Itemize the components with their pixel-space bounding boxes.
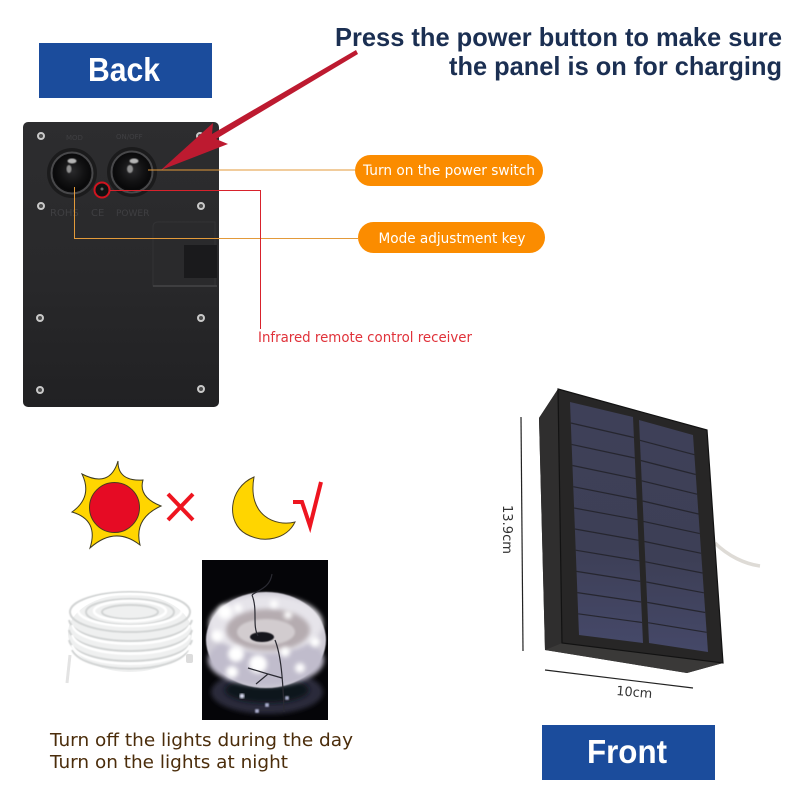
- battery cover: [153, 222, 217, 286]
- photo: rope light daytime: [67, 592, 193, 683]
- dimension: width: [545, 670, 693, 702]
- label: Back: Back: [88, 51, 161, 88]
- embossed marks: CE: [91, 208, 104, 219]
- leader line: power switch: [148, 169, 355, 171]
- embossed marks: [50, 133, 149, 219]
- infrared receiver: [94, 182, 110, 198]
- panel casing: [539, 389, 723, 673]
- embossed marks: ROHS: [50, 208, 79, 219]
- photo: rope light at night: [202, 560, 328, 720]
- glowing coil: [206, 592, 326, 688]
- solar cells: [570, 402, 708, 652]
- icon: cross: [168, 494, 193, 520]
- text: day and night usage: [49, 730, 353, 773]
- embossed marks: POWER: [116, 209, 149, 219]
- photo: solar panel front: [539, 389, 760, 673]
- dimension: height: 13.9cm: [499, 505, 514, 554]
- icon: sun: [72, 461, 161, 548]
- leader line: mode key: [74, 187, 358, 238]
- panel: back of solar box: [23, 122, 219, 407]
- wires: [248, 574, 284, 712]
- label: Front: Front: [587, 733, 667, 770]
- embossed marks: MOD: [66, 134, 83, 142]
- heading: power button instruction: the panel is on for charging: [449, 51, 782, 81]
- text: day and night usage: Turn on the lights at night: [49, 752, 288, 773]
- heading: power button instruction: Press the power button to make sure: [335, 22, 782, 52]
- bright spots: [211, 600, 320, 678]
- callout: mode key: [358, 222, 545, 253]
- button: mode: [47, 148, 97, 198]
- label: Front: [542, 725, 715, 780]
- icon: check: [293, 482, 321, 526]
- embossed marks: ON/OFF: [116, 133, 143, 141]
- label: Back: [39, 43, 212, 98]
- button: power: [107, 147, 157, 197]
- screws: [37, 133, 204, 393]
- callout: mode key: Mode adjustment key: [378, 231, 526, 247]
- callout: power switch: [355, 155, 543, 186]
- reflection: [211, 670, 323, 714]
- cable: [715, 543, 760, 566]
- callout: power switch: Turn on the power switch: [362, 163, 535, 179]
- leader line: infrared receiver: [110, 190, 260, 329]
- dimension: width: 10cm: [616, 684, 653, 702]
- text: day and night usage: Turn off the lights during the day: [49, 730, 353, 751]
- cell dividers: [571, 423, 707, 632]
- heading: power button instruction: [335, 22, 782, 81]
- callout: infrared receiver: Infrared remote control receiver: [258, 330, 472, 346]
- arrow: pointing to power button: [161, 50, 358, 170]
- icon: moon: [233, 477, 295, 539]
